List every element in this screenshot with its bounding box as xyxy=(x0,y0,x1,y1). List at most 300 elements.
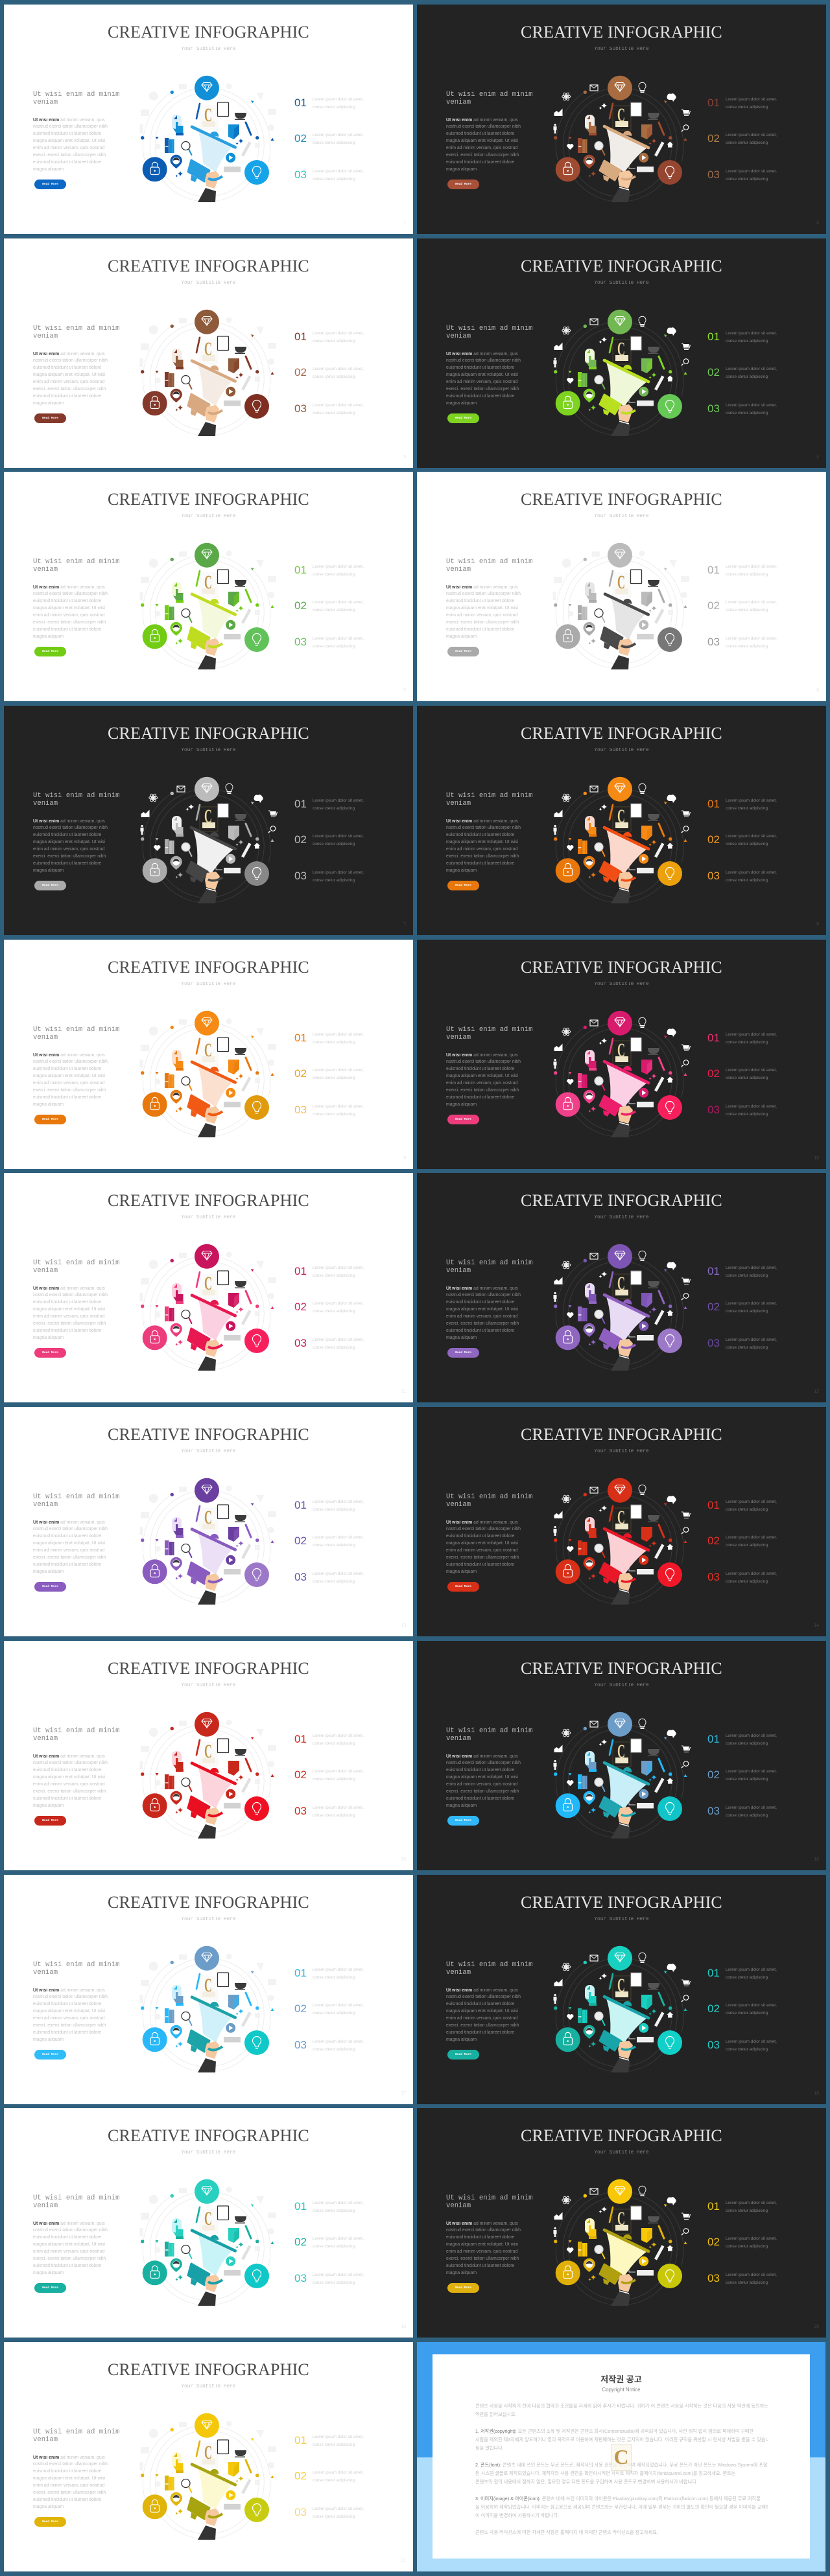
item 01: Lorem ipsum dolor sit amet, xyxy=(726,1266,777,1270)
body text: magna aliquam xyxy=(33,1102,64,1107)
body text: exerci. exerci tation ullamcorper nibh xyxy=(446,1321,519,1326)
copyright body text: 1. 저작권(copyright): 모든 콘텐츠의 소유 및 저작권은 콘텐츠 회사(Contentstudio)에 귀속되어 있습니다. 사전 허락 없이 임의로 복제하여 구매한 xyxy=(475,2428,753,2434)
item 03 xyxy=(707,636,777,649)
page number: 19 xyxy=(401,2325,406,2329)
megaphone infographic: C xyxy=(204,104,212,126)
panel: slide 9 orange light xyxy=(4,940,413,1169)
copyright body text: 사람을 제외한 제3자에게 양도하거나 영리 목적으로 이용하여 재판매하는 것은 금지되어 있습니다. 이러한 규칙을 위반할 시 민사상 처벌을 받을 수 있습니다 xyxy=(475,2437,768,2442)
heading: Ut wisi enim ad minim xyxy=(446,2194,533,2202)
item 03: 03 xyxy=(707,168,720,181)
body text: nostrud exerci tation ullamcorper nibh xyxy=(33,826,108,830)
subtitle: Your Subtitle Here xyxy=(181,2150,236,2155)
item 03: Lorem ipsum dolor sit amet, xyxy=(313,2039,364,2044)
body text xyxy=(446,1988,534,2043)
subtitle: Your Subtitle Here xyxy=(594,982,649,987)
item 01: 01 xyxy=(707,97,720,109)
item 03 xyxy=(294,2506,379,2522)
megaphone infographic xyxy=(130,1233,285,1389)
body text: Ut wisi enim ad minim veniam, quis xyxy=(33,118,105,122)
item 01: Lorem ipsum dolor sit amet, xyxy=(726,564,777,569)
page number: 14 xyxy=(814,1623,819,1628)
item 02: 02 xyxy=(707,132,720,145)
page number: 16 xyxy=(814,1857,819,1862)
item 03 xyxy=(707,402,777,415)
heading: veniam xyxy=(33,1267,58,1275)
heading: veniam xyxy=(33,1501,58,1509)
button xyxy=(34,2050,66,2060)
body text: Ut wisi enim ad minim veniam, quis xyxy=(446,2222,518,2226)
panel: slide 14 red dark xyxy=(417,1407,826,1636)
body text: euismod tincidunt ut laoreet dolore xyxy=(33,394,101,399)
body text xyxy=(33,1286,121,1341)
item 02: conse ctetur adipiscing xyxy=(726,1309,768,1314)
item 03: 03 xyxy=(707,1805,720,1817)
item 03: conse ctetur adipiscing xyxy=(726,644,768,649)
body text: enim ad minim veniam, quis nostrud xyxy=(446,1314,517,1319)
body text: magna aliquam erat volutpat. Ut wisi xyxy=(446,1074,518,1078)
megaphone infographic xyxy=(140,75,276,202)
body text: exerci. exerci tation ullamcorper nibh xyxy=(33,2023,106,2028)
item 02: Lorem ipsum dolor sit amet, xyxy=(313,1769,364,1774)
item 03: 03 xyxy=(294,1805,307,1817)
item 03 xyxy=(707,168,777,181)
item 02 xyxy=(707,366,777,379)
heading: veniam xyxy=(33,2202,58,2210)
subtitle: Your Subtitle Here xyxy=(594,1449,649,1454)
item 02: conse ctetur adipiscing xyxy=(313,375,355,379)
body text: magna aliquam xyxy=(33,1803,64,1808)
item 02: Lorem ipsum dolor sit amet, xyxy=(313,1535,364,1540)
item 01 xyxy=(707,97,777,110)
body text: euismod tincidunt ut laoreet dolore xyxy=(446,1796,514,1801)
title: CREATIVE INFOGRAPHIC xyxy=(108,257,309,275)
item 02: Lorem ipsum dolor sit amet, xyxy=(726,133,777,137)
copyright subtitle: Copyright Notice xyxy=(602,2387,641,2393)
subtitle: Your Subtitle Here xyxy=(594,514,649,519)
body text: exerci. exerci tation ullamcorper nibh xyxy=(446,620,519,625)
item 03: 03 xyxy=(294,636,307,648)
body text: magna aliquam erat volutpat. Ut wisi xyxy=(446,139,518,143)
heading xyxy=(446,1259,543,1275)
item 01: Lorem ipsum dolor sit amet, xyxy=(726,331,777,336)
heading: Ut wisi enim ad minim xyxy=(446,1026,533,1034)
panel: slide 7 grey dark xyxy=(4,706,413,935)
body text: magna aliquam erat volutpat. Ut wisi xyxy=(446,373,518,377)
item 03: Lorem ipsum dolor sit amet, xyxy=(313,403,364,408)
heading: veniam xyxy=(446,1735,471,1743)
item 01: Lorem ipsum dolor sit amet, xyxy=(726,798,777,803)
panel: slide 15 red light xyxy=(4,1641,413,1870)
body text: exerci. exerci tation ullamcorper nibh xyxy=(33,1321,106,1326)
item 02: Lorem ipsum dolor sit amet, xyxy=(726,1769,777,1774)
page number: 1 xyxy=(403,221,406,226)
item 01: 01 xyxy=(707,2200,720,2212)
body text: magna aliquam xyxy=(446,868,477,872)
logo: C xyxy=(613,2445,629,2468)
body text xyxy=(446,118,521,171)
heading: Ut wisi enim ad minim xyxy=(33,1961,120,1969)
item 01: 01 xyxy=(707,564,720,576)
subtitle: Your Subtitle Here xyxy=(181,1215,236,1220)
body text: exerci. exerci tation ullamcorper nibh xyxy=(446,1789,519,1794)
item 03: 03 xyxy=(294,1571,307,1583)
item 02: 02 xyxy=(707,833,720,846)
heading: veniam xyxy=(33,800,58,807)
item 03: conse ctetur adipiscing xyxy=(726,2280,768,2285)
body text: magna aliquam erat volutpat. Ut wisi xyxy=(33,840,105,844)
heading xyxy=(33,2428,130,2444)
body text: magna aliquam erat volutpat. Ut wisi xyxy=(446,1541,518,1546)
heading xyxy=(33,325,120,340)
item 03: Lorem ipsum dolor sit amet, xyxy=(726,1805,777,1810)
title: CREATIVE INFOGRAPHIC xyxy=(521,490,722,509)
body text: euismod tincidunt ut laoreet dolore xyxy=(33,1067,101,1071)
body text: exerci. exerci tation ullamcorper nibh xyxy=(33,620,106,625)
item 02: 02 xyxy=(707,599,720,612)
body text: exerci. exerci tation ullamcorper nibh xyxy=(33,1088,106,1093)
heading: veniam xyxy=(446,1501,471,1509)
body text: enim ad minim veniam, quis nostrud xyxy=(446,847,517,852)
item 01: 01 xyxy=(294,564,307,576)
body text: enim ad minim veniam, quis nostrud xyxy=(33,146,104,150)
item 03: 03 xyxy=(294,870,307,882)
button: Read More xyxy=(455,884,471,887)
heading: Ut wisi enim ad minim xyxy=(446,558,533,566)
item 03: conse ctetur adipiscing xyxy=(726,177,768,181)
item 02: Lorem ipsum dolor sit amet, xyxy=(313,2470,364,2475)
button: Read More xyxy=(42,2286,58,2290)
title: CREATIVE INFOGRAPHIC xyxy=(108,1659,309,1678)
button: Read More xyxy=(42,2053,58,2056)
megaphone infographic xyxy=(140,543,276,669)
button xyxy=(34,1348,66,1358)
body text: magna aliquam xyxy=(33,2271,64,2275)
item 02: 02 xyxy=(294,1301,307,1313)
copyright heading: 저작권 공고 xyxy=(600,2374,642,2384)
item 03: conse ctetur adipiscing xyxy=(313,1579,355,1584)
item 02: conse ctetur adipiscing xyxy=(726,1076,768,1080)
button: Read More xyxy=(42,650,58,653)
item 02 xyxy=(707,2236,792,2251)
body text xyxy=(33,118,108,171)
body text: Ut wisi enim ad minim veniam, quis xyxy=(33,352,105,356)
heading: veniam xyxy=(446,2202,471,2210)
panel: slide 10 pink dark xyxy=(417,940,826,1169)
item 01: conse ctetur adipiscing xyxy=(726,1975,768,1980)
title: CREATIVE INFOGRAPHIC xyxy=(108,958,309,977)
heading: veniam xyxy=(446,1034,471,1041)
megaphone infographic: C xyxy=(617,806,625,827)
item 03: 03 xyxy=(294,1104,307,1116)
megaphone infographic xyxy=(543,1467,698,1623)
heading: veniam xyxy=(446,800,471,807)
item 03: Lorem ipsum dolor sit amet, xyxy=(726,2273,777,2277)
item 01 xyxy=(294,1733,379,1748)
button xyxy=(34,413,66,423)
item 02 xyxy=(294,2002,379,2018)
item 03: Lorem ipsum dolor sit amet, xyxy=(313,2273,364,2277)
megaphone infographic: C xyxy=(204,1975,212,1996)
item 02 xyxy=(294,366,364,379)
item 03: Lorem ipsum dolor sit amet, xyxy=(726,1338,777,1342)
body text: euismod tincidunt ut laoreet dolore xyxy=(446,1067,514,1071)
megaphone infographic xyxy=(130,2168,285,2324)
copyright body text: 됨을 알립니다. xyxy=(475,2444,504,2451)
body text: euismod tincidunt ut laoreet dolore xyxy=(446,2002,514,2006)
item 01 xyxy=(294,1967,379,1982)
button: Read More xyxy=(455,650,471,653)
heading: Ut wisi enim ad minim xyxy=(446,1961,533,1969)
heading: veniam xyxy=(33,2436,58,2444)
item 02: conse ctetur adipiscing xyxy=(313,1543,355,1548)
body text: enim ad minim veniam, quis nostrud xyxy=(446,1081,517,1085)
panel: slide 2 brown dark xyxy=(417,5,826,234)
item 03: Lorem ipsum dolor sit amet, xyxy=(726,636,777,641)
subtitle: Your Subtitle Here xyxy=(181,1683,236,1688)
heading: Ut wisi enim ad minim xyxy=(446,325,533,332)
item 03: 03 xyxy=(707,2039,720,2051)
item 02 xyxy=(294,132,364,145)
heading: Ut wisi enim ad minim xyxy=(446,1259,533,1267)
item 01 xyxy=(707,331,777,343)
megaphone infographic xyxy=(130,2402,285,2558)
heading xyxy=(446,1727,543,1743)
item 02: conse ctetur adipiscing xyxy=(313,1309,355,1314)
body text: enim ad minim veniam, quis nostrud xyxy=(446,1782,517,1787)
title: CREATIVE INFOGRAPHIC xyxy=(108,724,309,743)
page number: 11 xyxy=(401,1389,406,1394)
item 02: 02 xyxy=(707,1067,720,1080)
body text: euismod tincidunt ut laoreet dolore xyxy=(33,2469,101,2474)
button xyxy=(447,2283,479,2293)
item 03: Lorem ipsum dolor sit amet, xyxy=(313,870,364,875)
item 02: 02 xyxy=(294,833,307,846)
body text: magna aliquam xyxy=(446,1803,477,1808)
title: CREATIVE INFOGRAPHIC xyxy=(521,958,722,977)
body text: exerci. exerci tation ullamcorper nibh xyxy=(33,153,106,157)
item 02: 02 xyxy=(294,1067,307,1080)
item 03 xyxy=(294,1805,379,1820)
body text: enim ad minim veniam, quis nostrud xyxy=(33,847,104,852)
item 01 xyxy=(294,331,364,343)
item 01: 01 xyxy=(294,1032,307,1044)
megaphone infographic xyxy=(543,1000,698,1155)
panel: copyright notice xyxy=(417,2342,825,2571)
body text: euismod tincidunt ut laoreet dolore xyxy=(33,627,101,632)
panel: slide 5 green light xyxy=(4,472,413,701)
item 01 xyxy=(294,564,364,577)
item 02: 02 xyxy=(294,2236,307,2248)
body text: Ut wisi enim ad minim veniam, quis xyxy=(33,1754,105,1759)
body text: magna aliquam xyxy=(446,2271,477,2275)
button xyxy=(34,1115,66,1124)
megaphone infographic: C xyxy=(617,104,625,126)
body text: euismod tincidunt ut laoreet dolore xyxy=(33,132,101,136)
copyright body text: 이 이미지를 변경하여 사용하시기 바랍니다. xyxy=(475,2512,559,2518)
item 01 xyxy=(294,1499,379,1514)
item 02: conse ctetur adipiscing xyxy=(313,2478,355,2483)
body text: Ut wisi enim ad minim veniam, quis xyxy=(33,1286,105,1291)
item 03: conse ctetur adipiscing xyxy=(313,878,355,883)
copyright body text: 콘텐츠의 협의 내용에서 정하지 않은, 필요한 경우 다른 폰트를 구입하여 사용 폰트로 변경하여 사용하시기 바랍니다. xyxy=(475,2478,698,2485)
panel: slide 6 grey light xyxy=(417,472,826,701)
body text: Ut wisi enim ad minim veniam, quis xyxy=(33,1053,105,1058)
body text: enim ad minim veniam, quis nostrud xyxy=(33,1081,104,1085)
body text: enim ad minim veniam, quis nostrud xyxy=(33,613,104,618)
item 03: conse ctetur adipiscing xyxy=(313,1345,355,1350)
item 01: Lorem ipsum dolor sit amet, xyxy=(313,331,364,336)
body text: nostrud exerci tation ullamcorper nibh xyxy=(446,358,521,363)
item 03: 03 xyxy=(707,2272,720,2284)
megaphone infographic: C xyxy=(204,572,212,593)
body text: nostrud exerci tation ullamcorper nibh xyxy=(33,358,108,363)
panel: slide 11 pink light xyxy=(4,1173,413,1402)
body text: magna aliquam erat volutpat. Ut wisi xyxy=(33,139,105,143)
megaphone infographic xyxy=(140,776,278,903)
body text: Ut wisi enim ad minim veniam, quis xyxy=(446,1053,518,1058)
item 01: 01 xyxy=(294,1967,307,1979)
megaphone infographic: C xyxy=(204,1507,212,1528)
heading: veniam xyxy=(446,1267,471,1275)
subtitle: Your Subtitle Here xyxy=(594,1215,649,1220)
item 01 xyxy=(707,1967,792,1982)
body text xyxy=(33,2455,121,2511)
item 02: conse ctetur adipiscing xyxy=(313,608,355,612)
heading: veniam xyxy=(446,566,471,574)
body text: Ut wisi enim ad minim veniam, quis xyxy=(33,2455,105,2460)
button: Read More xyxy=(455,183,471,186)
subtitle: Your Subtitle Here xyxy=(594,1917,649,1922)
button: Read More xyxy=(42,1118,58,1121)
item 02: Lorem ipsum dolor sit amet, xyxy=(313,133,364,137)
megaphone infographic xyxy=(140,310,276,436)
item 01: conse ctetur adipiscing xyxy=(313,572,355,577)
item 03: conse ctetur adipiscing xyxy=(726,1813,768,1818)
item 02: conse ctetur adipiscing xyxy=(726,1543,768,1548)
item 01: 01 xyxy=(707,1733,720,1745)
subtitle: Your Subtitle Here xyxy=(594,1683,649,1688)
button: Read More xyxy=(455,2053,471,2056)
panel: slide 17 sky light xyxy=(4,1875,413,2104)
item 03 xyxy=(707,1337,792,1352)
button xyxy=(34,180,66,189)
item 03: Lorem ipsum dolor sit amet, xyxy=(313,1572,364,1576)
heading xyxy=(446,1493,543,1509)
item 01: 01 xyxy=(707,1967,720,1979)
megaphone infographic: C xyxy=(617,1975,625,1996)
item 02: conse ctetur adipiscing xyxy=(313,2011,355,2015)
body text: enim ad minim veniam, quis nostrud xyxy=(33,2016,104,2021)
body text: magna aliquam xyxy=(33,1570,64,1573)
panel: slide 8 orange dark xyxy=(417,706,826,935)
body text: euismod tincidunt ut laoreet dolore xyxy=(446,132,514,136)
item 02: Lorem ipsum dolor sit amet, xyxy=(726,1068,777,1073)
item 01: conse ctetur adipiscing xyxy=(726,105,768,110)
megaphone infographic: C xyxy=(617,1039,625,1061)
item 02: 02 xyxy=(294,1769,307,1781)
heading: veniam xyxy=(33,99,58,106)
body text: euismod tincidunt ut laoreet dolore xyxy=(446,2235,514,2240)
body text: Ut wisi enim ad minim veniam, quis xyxy=(446,1520,518,1525)
item 01 xyxy=(294,2200,379,2216)
item 03: conse ctetur adipiscing xyxy=(726,1112,768,1117)
item 01 xyxy=(294,2434,379,2450)
title: CREATIVE INFOGRAPHIC xyxy=(521,23,722,41)
title: CREATIVE INFOGRAPHIC xyxy=(108,490,309,509)
body text: euismod tincidunt ut laoreet dolore xyxy=(33,1534,101,1538)
page number: 7 xyxy=(403,922,406,927)
title: CREATIVE INFOGRAPHIC xyxy=(108,1191,309,1210)
body text: Ut wisi enim ad minim veniam, quis xyxy=(446,1754,518,1759)
item 02: 02 xyxy=(707,366,720,378)
body text: nostrud exerci tation ullamcorper nibh xyxy=(33,124,108,129)
button: Read More xyxy=(455,2286,471,2290)
body text: nostrud exerci tation ullamcorper nibh xyxy=(446,1527,521,1531)
button xyxy=(447,2050,479,2060)
body text: exerci. exerci tation ullamcorper nibh xyxy=(446,1555,519,1560)
item 01: conse ctetur adipiscing xyxy=(313,806,355,811)
body text: magna aliquam erat volutpat. Ut wisi xyxy=(33,373,105,377)
body text: euismod tincidunt ut laoreet dolore xyxy=(33,599,101,603)
item 01: Lorem ipsum dolor sit amet, xyxy=(726,97,777,102)
item 03 xyxy=(294,1337,379,1352)
item 02 xyxy=(707,132,777,145)
item 02: conse ctetur adipiscing xyxy=(726,141,768,145)
item 01: conse ctetur adipiscing xyxy=(726,2209,768,2213)
item 02: 02 xyxy=(294,2002,307,2015)
body text: Ut wisi enim ad minim veniam, quis xyxy=(33,1520,105,1525)
item 02: Lorem ipsum dolor sit amet, xyxy=(726,600,777,605)
item 02 xyxy=(294,599,364,612)
item 03: 03 xyxy=(294,402,307,415)
body text: magna aliquam erat volutpat. Ut wisi xyxy=(33,1541,105,1546)
body text: exerci. exerci tation ullamcorper nibh xyxy=(33,1555,106,1560)
item 03: conse ctetur adipiscing xyxy=(313,177,355,181)
item 01: conse ctetur adipiscing xyxy=(313,105,355,110)
panel: slide 3 brown light xyxy=(4,238,413,468)
item 03: 03 xyxy=(294,2039,307,2051)
item 01: Lorem ipsum dolor sit amet, xyxy=(313,1032,364,1037)
item 01: 01 xyxy=(707,798,720,810)
body text: Ut wisi enim ad minim veniam, quis xyxy=(446,118,518,122)
button: Read More xyxy=(455,1585,471,1588)
item 03 xyxy=(707,1104,792,1119)
item 02 xyxy=(707,599,777,612)
item 02 xyxy=(294,833,379,849)
item 03: 03 xyxy=(707,870,720,882)
heading xyxy=(446,792,543,808)
heading: Ut wisi enim ad minim xyxy=(446,91,533,99)
body text: magna aliquam erat volutpat. Ut wisi xyxy=(33,2476,105,2481)
subtitle: Your Subtitle Here xyxy=(594,47,649,52)
body text: magna aliquam xyxy=(33,167,64,171)
subtitle: Your Subtitle Here xyxy=(594,748,649,753)
copyright body text xyxy=(475,2402,768,2538)
body text: nostrud exerci tation ullamcorper nibh xyxy=(446,1293,521,1297)
body text xyxy=(33,352,108,406)
item 02 xyxy=(707,1067,792,1083)
item 02 xyxy=(294,1769,379,1784)
body text: enim ad minim veniam, quis nostrud xyxy=(446,2249,517,2254)
subtitle: Your Subtitle Here xyxy=(181,748,236,753)
title: CREATIVE INFOGRAPHIC xyxy=(108,1893,309,1912)
body text: euismod tincidunt ut laoreet dolore xyxy=(33,2235,101,2240)
megaphone infographic xyxy=(554,75,691,202)
title: CREATIVE INFOGRAPHIC xyxy=(521,2126,722,2145)
megaphone infographic xyxy=(543,1701,698,1857)
heading xyxy=(446,1026,543,1042)
body text xyxy=(446,2221,534,2277)
